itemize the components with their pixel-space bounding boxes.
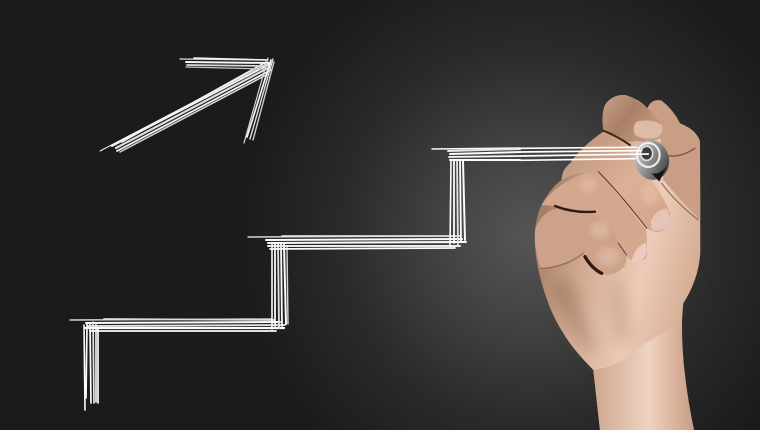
marker line over hand: [520, 147, 648, 160]
step 3 tread: [432, 148, 520, 160]
step 1 riser: [84, 322, 98, 410]
knuckle highlights: [580, 178, 659, 266]
wrist: [593, 320, 694, 430]
step 2 riser: [272, 243, 288, 329]
marker tip: [630, 136, 674, 184]
chart: sketched staircase: [70, 148, 520, 410]
step 1 tread: [70, 319, 285, 331]
icon: sketched arrow: [100, 58, 274, 152]
palm shading: [550, 280, 633, 357]
icon: hand holding marker: [520, 95, 700, 430]
finger creases: [541, 131, 698, 273]
middle finger: [542, 173, 647, 261]
thumb: [602, 95, 663, 142]
hand silhouette: [535, 95, 700, 430]
back finger: [647, 100, 700, 220]
thumbnail: [634, 121, 663, 139]
step 3 riser: [450, 160, 465, 246]
ring finger knuckle: [535, 208, 626, 275]
index finger: [562, 133, 670, 232]
step 2 tread: [248, 236, 466, 249]
index fingernail: [651, 208, 670, 231]
middle fingernail: [632, 242, 647, 262]
